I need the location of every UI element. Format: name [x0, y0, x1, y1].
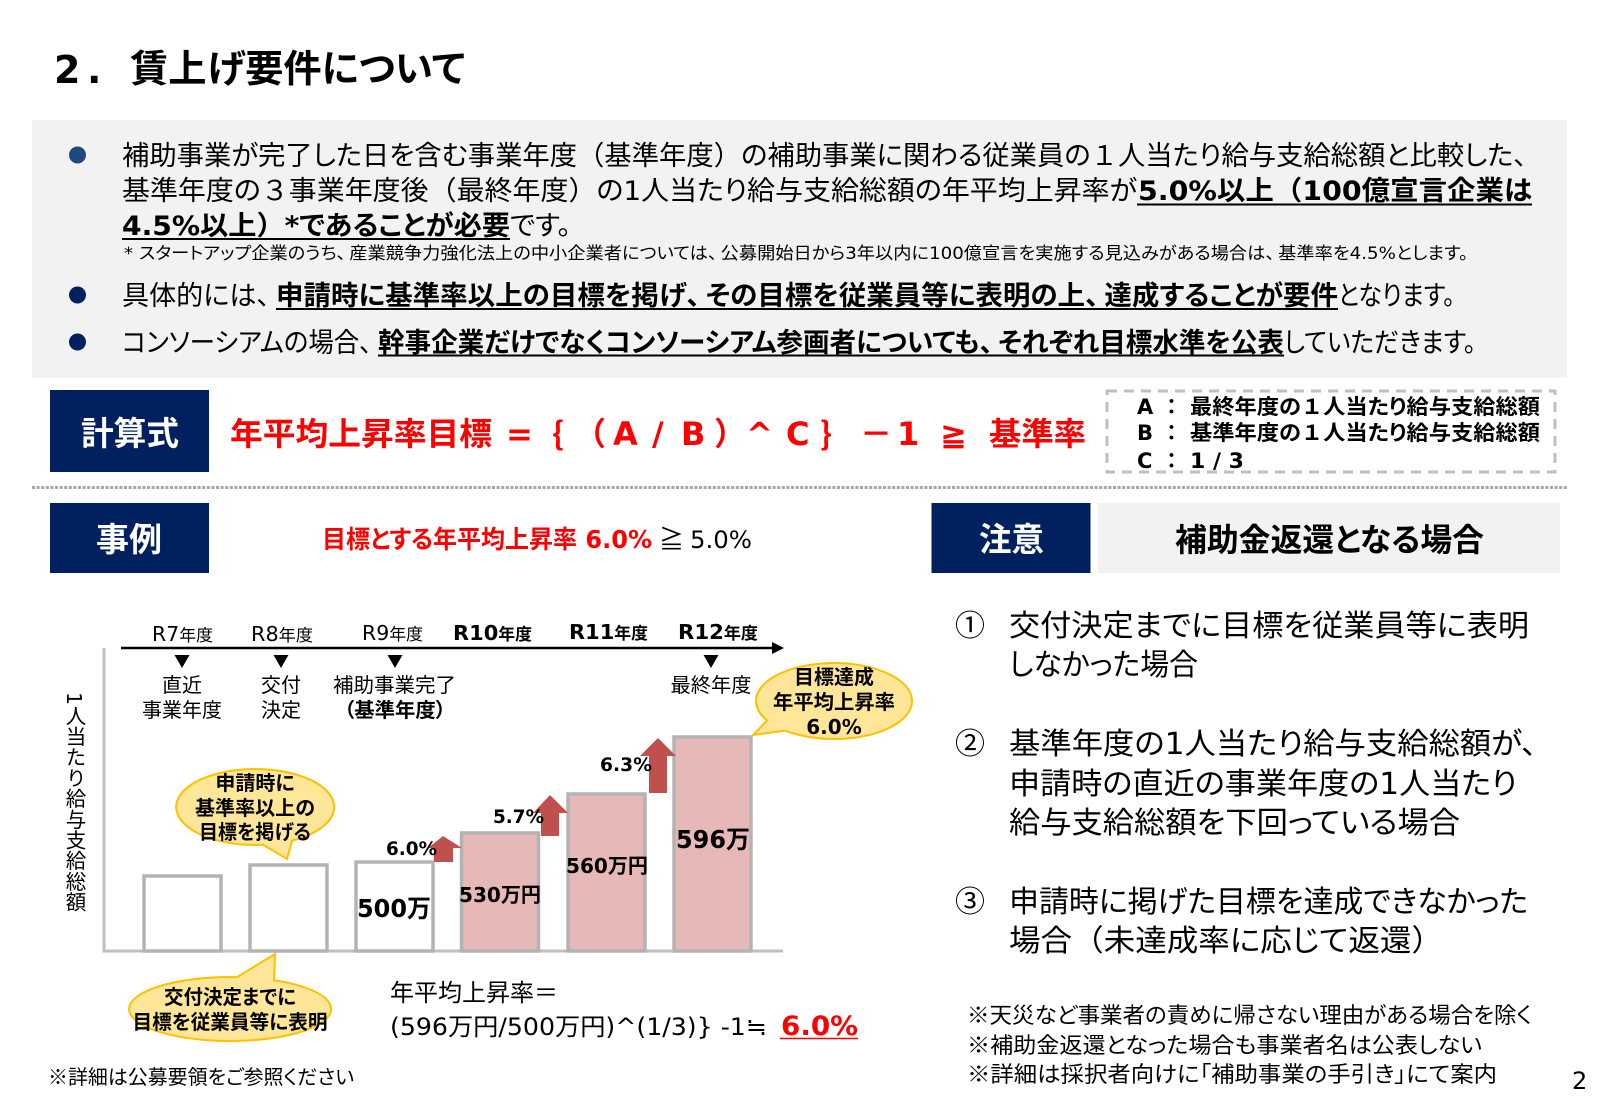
callout: announce to employees: 交付決定までに [164, 985, 296, 1009]
formula: 1 [897, 415, 919, 453]
callout: target achieved [753, 663, 912, 739]
bar values: 500万 [357, 894, 431, 923]
legend: formula variables: 基準年度の １人当たり給与支給総額 [1190, 417, 1540, 447]
timeline captions: 決定 [261, 698, 301, 722]
label: calculation formula: 計算式 [81, 414, 179, 453]
note: see guidelines: ※詳細は公募要領をご参照ください [48, 1061, 354, 1090]
formula: － [860, 409, 892, 455]
timeline captions: （基準年度） [344, 694, 446, 723]
year labels [152, 620, 759, 646]
notes: exceptions: ※詳細は採択者向けに「補助事業の手引き」にて案内 [967, 1057, 1497, 1089]
notes: exceptions: ※天災など事業者の責めに帰さない理由がある場合を除く [967, 998, 1532, 1030]
year labels: R7年度 [152, 622, 213, 646]
formula: ） [714, 409, 746, 455]
growth rates: 6.3% [600, 755, 652, 776]
callout: set target at application: 申請時に [215, 771, 295, 795]
formula: = [506, 415, 533, 453]
legend: formula variables [1107, 391, 1555, 475]
formula: 年平均上昇率目標 [230, 415, 492, 453]
example target rate: 5.0% [690, 526, 752, 554]
callout: target achieved: 目標達成 [794, 665, 874, 689]
list: return case 2: 基準年度の1人当たり給与支給総額が、 [1009, 727, 1537, 762]
bullet paragraph 1: 基準年度の３事業年度後（最終年度）の1人当たり給与支給総額の年平均上昇率が [122, 169, 1138, 208]
timeline captions: 交付 [261, 673, 301, 697]
list: return case 2: 給与支給総額を下回っている場合 [1009, 806, 1460, 841]
bullet paragraph 1 [69, 134, 1532, 243]
example target rate: ≧ [659, 520, 684, 556]
bullet paragraph 3: 幹事企業だけでなくコンソーシアム参画者についても、それぞれ目標水準を公表 [378, 321, 1284, 360]
heading: subsidy return cases [1098, 503, 1560, 573]
title: 賃上げ要件について [130, 38, 465, 93]
list: return case 3: ③ [955, 877, 985, 921]
title: . [87, 48, 101, 92]
bullet paragraph 2: 申請時に基準率以上の目標を掲げ 、その目標を従業員等に表明の上 、達成することが要件 [276, 274, 1338, 313]
timeline captions: 最終年度 [670, 673, 752, 697]
list: return case 3: 場合（未達成率に応じて返還 ） [1009, 916, 1443, 960]
calculation example [390, 979, 858, 1042]
footnote: * スタートアップ企業のうち 、産業競争力強化法上の中小企業者については 、公募開始日から3年以内に100億宣言を実施する見込みがある場合は 、基準率を4.5%とします。 [124, 239, 1468, 264]
bullet paragraph 3: コンソーシアムの場合、 [122, 328, 372, 359]
bullet paragraph 2: 具体的には、 [122, 281, 270, 312]
legend: formula variables: ： [1161, 445, 1182, 475]
list: return case 3 [955, 877, 1528, 960]
callout: target achieved: 6.0% [806, 715, 862, 739]
timeline captions [142, 673, 752, 723]
formula: B [681, 415, 705, 453]
timeline markers [174, 655, 718, 668]
panel: summary requirements [32, 120, 1567, 378]
label: calculation formula [50, 390, 209, 472]
timeline arrow [121, 642, 784, 654]
growth rates: 5.7% [493, 807, 544, 828]
callout: announce to employees [129, 954, 331, 1041]
growth arrows [428, 738, 676, 862]
chart axes [104, 648, 783, 951]
bullet paragraph 2: となります。 [1338, 281, 1455, 312]
callout: target achieved: 年平均上昇率 [773, 690, 895, 714]
formula: C [786, 415, 809, 453]
timeline captions: 直近 [162, 673, 202, 697]
year labels: R8年度 [251, 622, 313, 646]
bar values: 530万円 [459, 883, 541, 907]
legend: formula variables: A [1137, 395, 1154, 419]
legend: formula variables: C [1137, 449, 1152, 473]
y axis label: 1人当たり給与支給総額 [62, 692, 86, 912]
growth rates: 6.0% [386, 839, 437, 860]
timeline captions: 事業年度 [142, 698, 222, 722]
callout: set target at application: 基準率以上の [195, 796, 315, 820]
timeline captions: 補助事業完了 [333, 673, 456, 697]
formula: } [820, 409, 832, 455]
formula: ^ [746, 415, 773, 453]
page number: 2 [1572, 1067, 1587, 1095]
heading: subsidy return cases: 補助金返還となる場合 [1175, 521, 1484, 559]
calculation example: (596万円/500万円)^(1/3)} -1≒ [390, 1013, 767, 1041]
legend: formula variables: 最終年度の １人当たり給与支給総額 [1190, 391, 1540, 421]
legend: formula variables: ： [1161, 417, 1182, 447]
formula [230, 409, 1086, 455]
list: return case 1: 交付決定までに目標を従業員等に表明 [1009, 609, 1529, 644]
bullet paragraph 1: です。 [510, 211, 571, 242]
bar values: 596万 [676, 825, 750, 854]
formula: / [652, 415, 664, 453]
list: return case 1 [955, 601, 1529, 683]
legend: formula variables: B [1137, 421, 1153, 445]
formula: （ [574, 409, 606, 455]
label: example: 事例 [96, 520, 162, 559]
year labels: R11年度 [569, 620, 649, 644]
bar values: 560万円 [566, 854, 648, 878]
notes: exceptions [967, 998, 1532, 1089]
bullet paragraph 3: していただきます。 [1284, 328, 1476, 359]
title: 2 [54, 48, 80, 92]
bullet paragraph 3 [69, 321, 1476, 360]
callout: set target at application [176, 769, 334, 859]
formula: ≧ [940, 415, 967, 453]
callout: set target at application: 目標を掲げる [199, 820, 311, 844]
legend: formula variables: ： [1161, 391, 1182, 421]
bars [144, 737, 751, 951]
calculation example: 6.0% [781, 1011, 858, 1042]
legend: formula variables: 1 / 3 [1190, 449, 1244, 473]
year labels: R9年度 [362, 621, 423, 645]
chart: wage growth example [62, 620, 912, 1041]
bar values [357, 825, 750, 923]
list: return case 1: しなかった場合 [1009, 648, 1198, 683]
list: return case 3: 申請時に掲げた目標を達成できなかった [1009, 885, 1528, 920]
formula: A [613, 415, 638, 453]
list: return case 2 [955, 719, 1537, 841]
year labels: R10年度 [453, 621, 533, 645]
calculation example: 年平均上昇率＝ [390, 979, 558, 1007]
label: caution: 注意 [979, 520, 1044, 559]
list: return case 1: ① [955, 601, 985, 645]
example target rate: 目標とする年平均上昇率 6.0% [322, 525, 652, 554]
list: return case 2: ② [955, 719, 985, 763]
bullet paragraph 1: 5.0%以上 （100億宣言企業は [1138, 169, 1532, 208]
label: example [50, 503, 209, 573]
label: caution [932, 503, 1090, 573]
list: return case 2: 申請時の直近の事業年度の1人当たり [1009, 767, 1517, 802]
year labels: R12年度 [678, 620, 759, 644]
example target rate [322, 520, 752, 556]
formula: 基準率 [989, 415, 1086, 453]
callout: announce to employees: 目標を従業員等に表明 [132, 1010, 328, 1034]
notes: exceptions: ※補助金返還となった場合も事業者名は公表しない [967, 1028, 1482, 1060]
growth rates [386, 755, 652, 860]
bullet paragraph 1: 4.5%以上）*であることが必要 [122, 204, 510, 243]
formula: { [552, 409, 564, 455]
bullet paragraph 1: 補助事業が完了した日を含む事業年度（基準年度）の補助事業に関わる従業員の１人当たり給与支給総額と比較した、 [122, 134, 1527, 173]
